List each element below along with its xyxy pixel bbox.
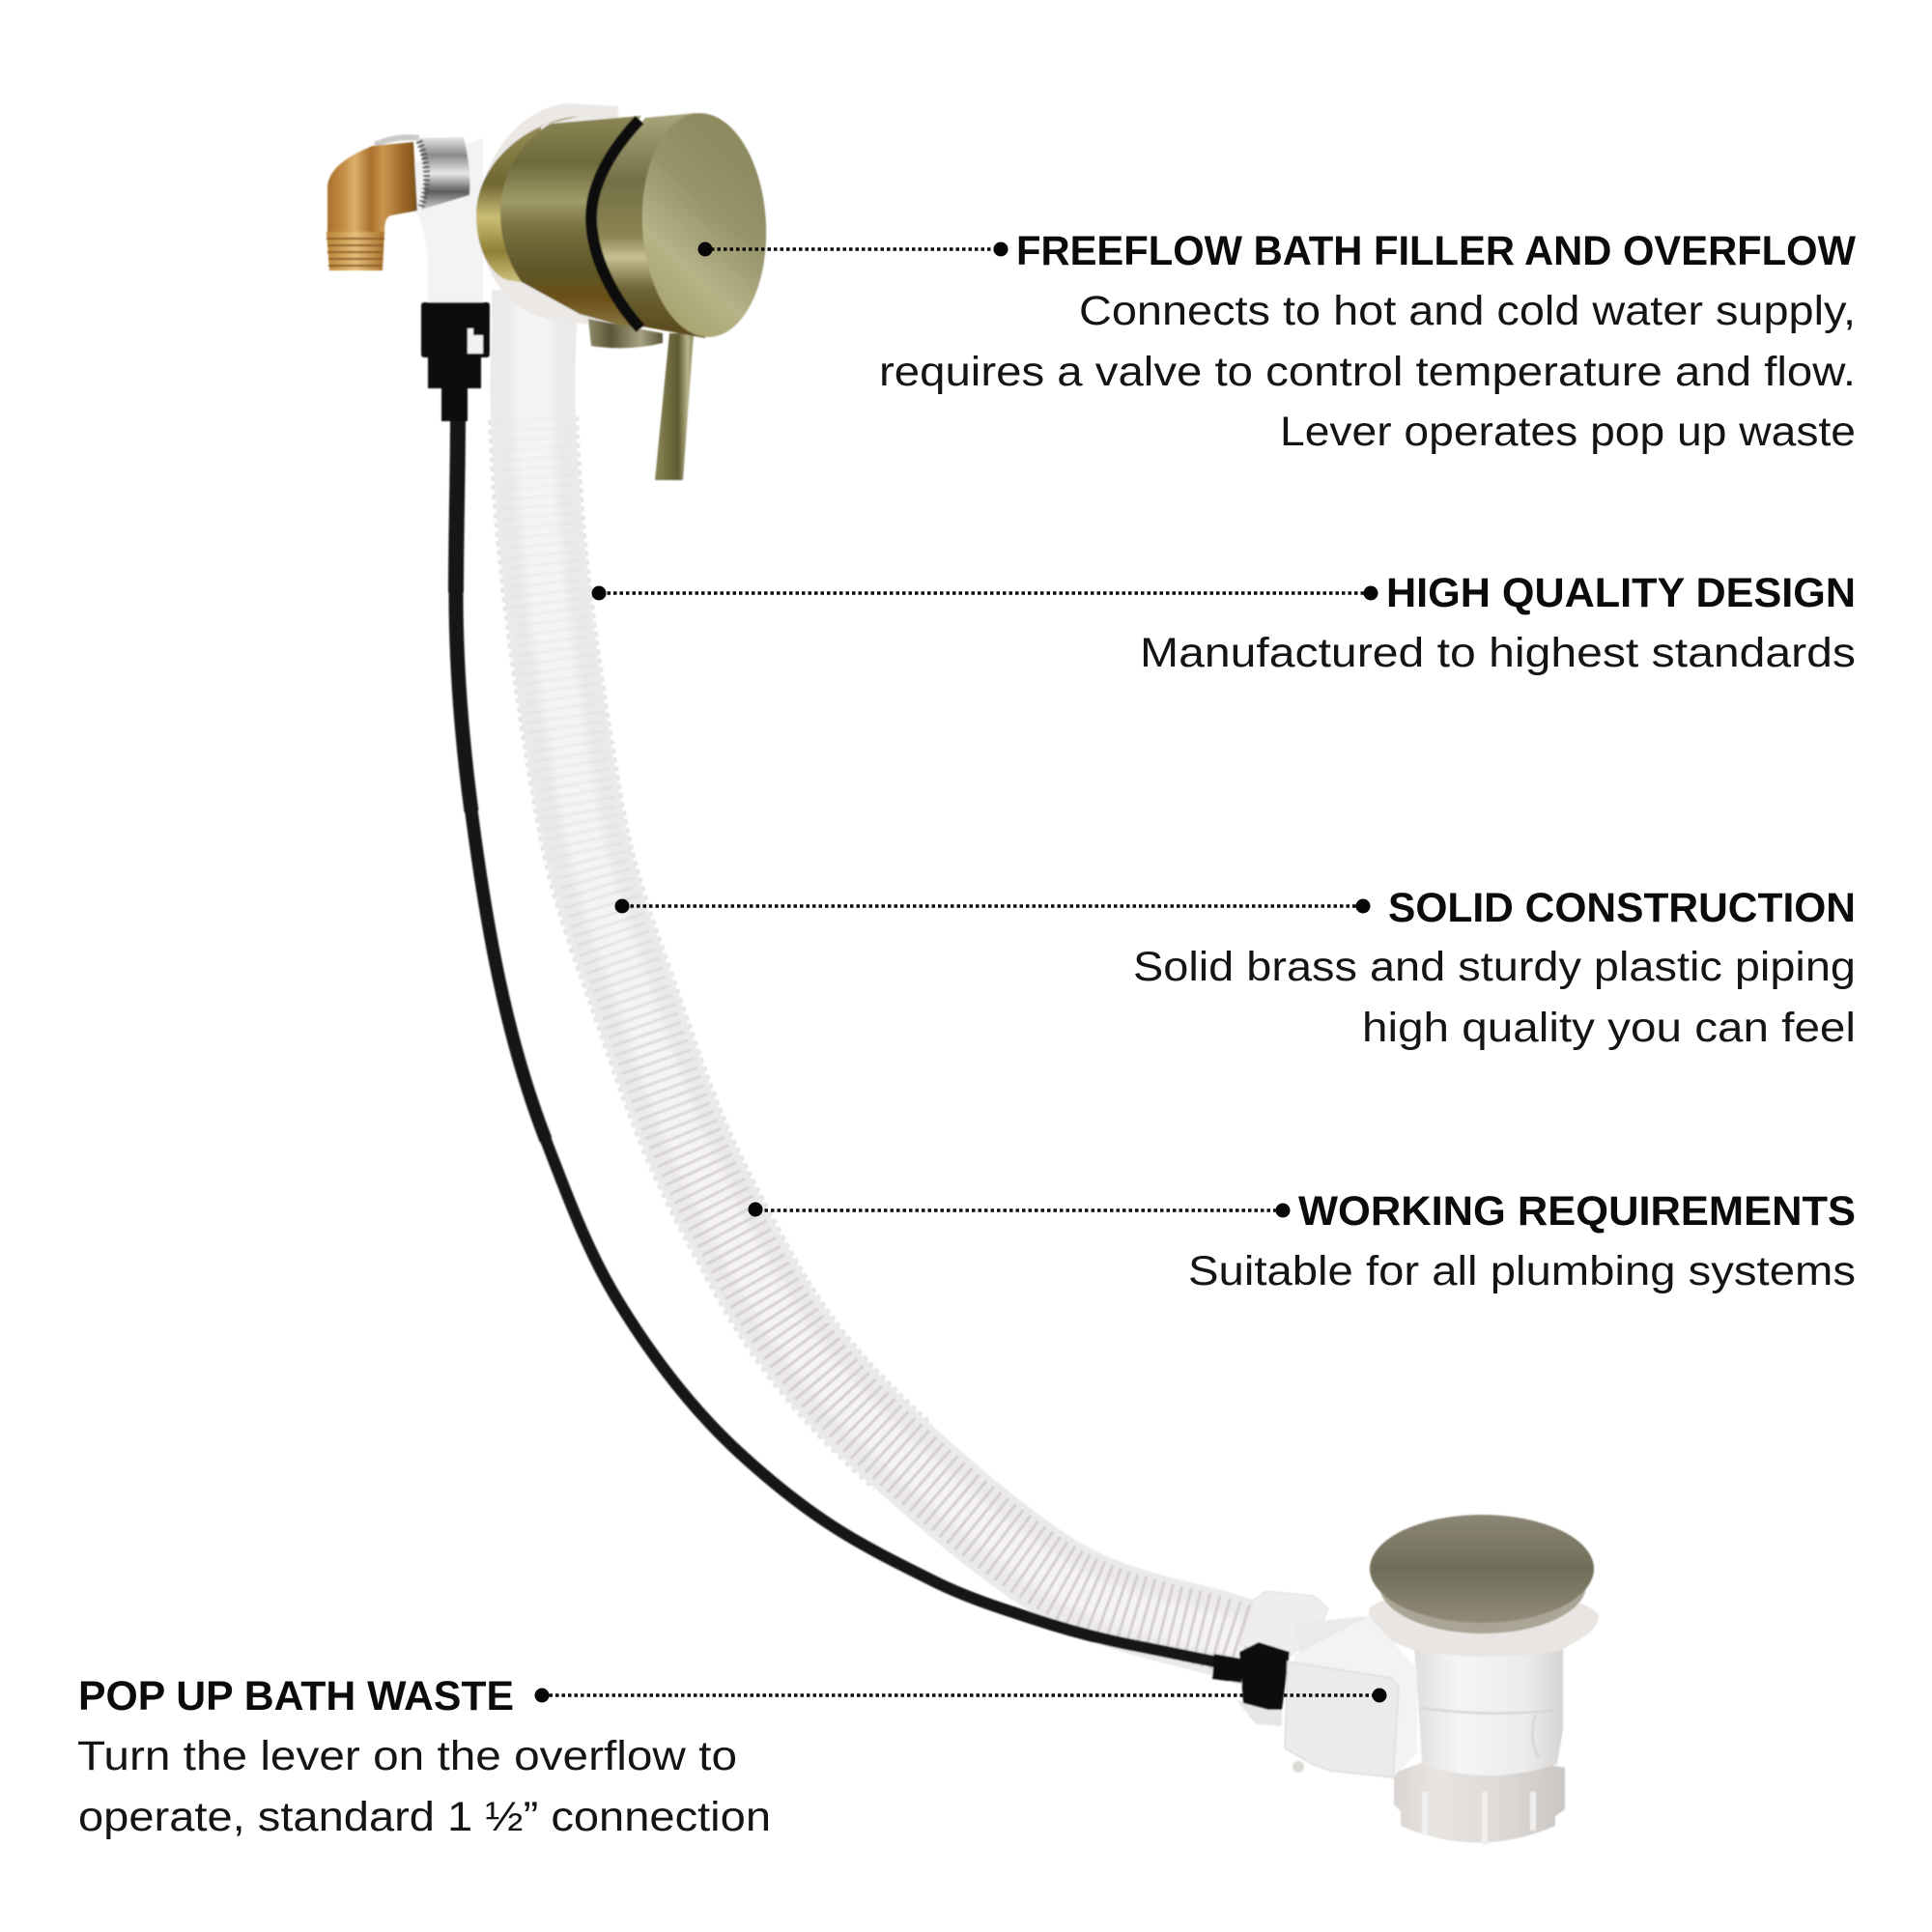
chrome compression nut (375, 137, 469, 210)
white wall flange (478, 103, 618, 328)
side actuator box face (1285, 1662, 1399, 1777)
description (879, 288, 1856, 455)
heading: POP UP BATH WASTE (78, 1673, 514, 1719)
heading: SOLID CONSTRUCTION (1388, 885, 1856, 931)
description (1133, 944, 1856, 1051)
leader line 2 (591, 585, 1378, 601)
pop-up control cable (456, 415, 1256, 1673)
callout: freeflow bath filler and overflow (697, 228, 1856, 455)
body groove (1421, 1708, 1560, 1758)
waste body (1413, 1633, 1563, 1776)
callout: pop up bath waste (77, 1673, 1387, 1840)
white under-clip tab (1236, 1700, 1282, 1726)
nut ribs (1425, 1792, 1533, 1845)
black cable clip (1212, 1642, 1290, 1710)
bath filler and overflow unit (327, 103, 772, 480)
brushed metal plug disc (1370, 1515, 1594, 1623)
description: Connects to hot and cold water supply, (1079, 288, 1856, 334)
brass body cylinder (500, 116, 641, 330)
leader line 1 (697, 242, 1009, 257)
connecting tube (1294, 1616, 1377, 1654)
description: requires a valve to control temperature and flow. (879, 349, 1856, 395)
black hose clip connector (421, 302, 490, 421)
brass elbow connector (327, 142, 417, 270)
illustration: bath filler and waste assembly (327, 103, 1599, 1845)
heading: FREEFLOW BATH FILLER AND OVERFLOW (1016, 228, 1856, 274)
side actuator box (1294, 1616, 1417, 1777)
leader line 5 (535, 1689, 1387, 1702)
callout: working requirements (748, 1188, 1856, 1294)
metal rim under disc (1379, 1537, 1586, 1634)
black shadow gap (591, 120, 640, 328)
brass cap side (597, 113, 705, 338)
description: Suitable for all plumbing systems (1188, 1248, 1856, 1294)
description: Turn the lever on the overflow to (77, 1733, 737, 1779)
callout: solid construction (614, 885, 1856, 1051)
lever handle (655, 333, 694, 480)
description: high quality you can feel (1362, 1005, 1856, 1051)
bottom stub under body (588, 319, 663, 348)
leader line 3 (614, 898, 1370, 914)
callout: high quality design (591, 570, 1856, 676)
waste flange (1369, 1592, 1599, 1657)
corrugated white hose (532, 290, 1275, 1652)
pop up bath waste unit (1212, 1515, 1599, 1845)
heading: HIGH QUALITY DESIGN (1386, 570, 1856, 616)
lower threaded nut (1394, 1760, 1565, 1843)
heading: WORKING REQUIREMENTS (1298, 1188, 1856, 1235)
white plastic housing (411, 138, 483, 302)
description (77, 1733, 771, 1840)
hose end collar (1239, 1591, 1328, 1657)
brass cap face (637, 110, 772, 340)
description: Lever operates pop up waste (1280, 409, 1856, 455)
description: Solid brass and sturdy plastic piping (1133, 944, 1856, 990)
brass body ring (476, 116, 580, 285)
description: Manufactured to highest standards (1140, 630, 1856, 676)
small lug on box (1293, 1761, 1304, 1773)
leader line 4 (748, 1202, 1291, 1217)
description: operate, standard 1 ½” connection (78, 1794, 771, 1840)
